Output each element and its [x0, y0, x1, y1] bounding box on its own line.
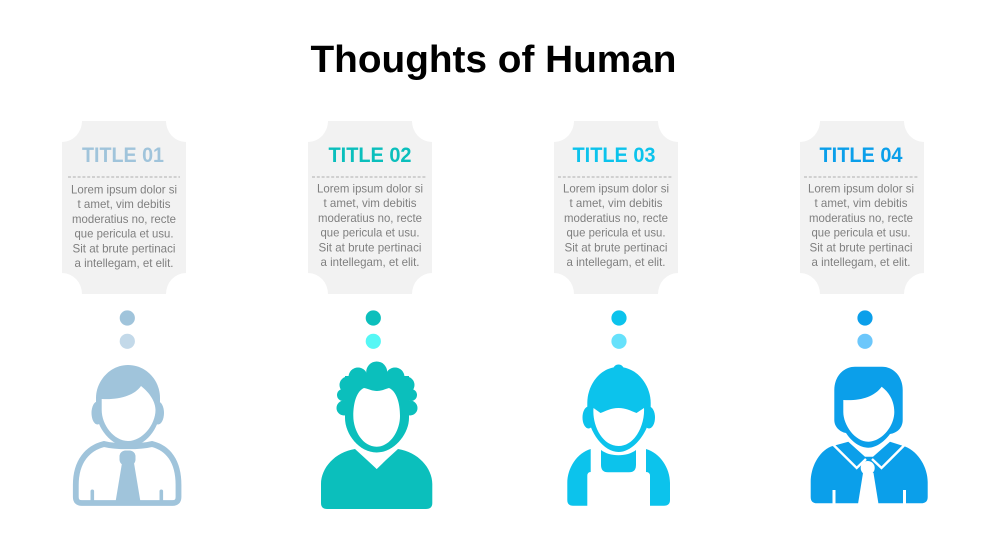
text block: title 04: moderatius no, recte: [809, 212, 913, 225]
text block: title 01: t amet, vim debitis: [78, 198, 171, 211]
text block: title 03: a intellegam, et elit.: [566, 256, 666, 269]
text block: title 02: [317, 182, 423, 269]
heading: title 04: TITLE 04: [820, 144, 903, 167]
thought dots 1: [120, 310, 135, 349]
text block: title 02: Sit at brute pertinaci: [318, 241, 422, 254]
heading: title 01: TITLE 01: [82, 144, 164, 167]
text block: title 01: moderatius no, recte: [72, 213, 176, 226]
icon: curly-haired person: [321, 362, 432, 509]
text block: title 02: a intellegam, et elit.: [320, 256, 420, 269]
text block: title 02: que pericula et usu.: [320, 227, 420, 240]
text block: title 04: t amet, vim debitis: [814, 197, 908, 210]
thought dots 4: [857, 310, 873, 349]
thought dots 3: [611, 310, 627, 349]
text block: title 04: [808, 182, 914, 269]
text block: title 01: Sit at brute pertinaci: [72, 242, 176, 255]
text block: title 04: Sit at brute pertinaci: [810, 241, 912, 254]
thought dots 2: [366, 310, 381, 349]
icon: woman with collar: [811, 367, 928, 504]
text block: title 04: a intellegam, et elit.: [812, 256, 910, 269]
text block: title 03: Sit at brute pertinaci: [564, 241, 668, 254]
panel: title 04: [800, 121, 924, 294]
text block: title 01: a intellegam, et elit.: [74, 257, 174, 270]
text block: title 01: [71, 184, 177, 270]
text block: title 03: que pericula et usu.: [566, 227, 666, 240]
heading: title 02: TITLE 02: [328, 144, 412, 167]
panel: title 02: [308, 121, 432, 294]
text block: title 04: Lorem ipsum dolor si: [808, 182, 914, 196]
text block: title 03: [563, 182, 669, 269]
text block: title 01: Lorem ipsum dolor si: [71, 184, 177, 196]
icon: person with cap and overalls: [567, 364, 670, 506]
heading: title 03: TITLE 03: [572, 144, 656, 167]
text block: title 01: que pericula et usu.: [74, 228, 174, 241]
text block: title 02: t amet, vim debitis: [324, 197, 417, 210]
text block: title 03: Lorem ipsum dolor si: [563, 182, 669, 196]
icon: man with tie: [76, 365, 178, 503]
text block: title 04: que pericula et usu.: [812, 227, 910, 240]
text block: title 02: Lorem ipsum dolor si: [317, 182, 423, 196]
text block: title 02: moderatius no, recte: [318, 212, 422, 225]
panel: title 01: [62, 121, 186, 294]
text block: title 03: t amet, vim debitis: [570, 197, 663, 210]
text block: title 03: moderatius no, recte: [564, 212, 668, 225]
title: Thoughts of Human: [310, 39, 676, 81]
panel: title 03: [554, 121, 678, 294]
